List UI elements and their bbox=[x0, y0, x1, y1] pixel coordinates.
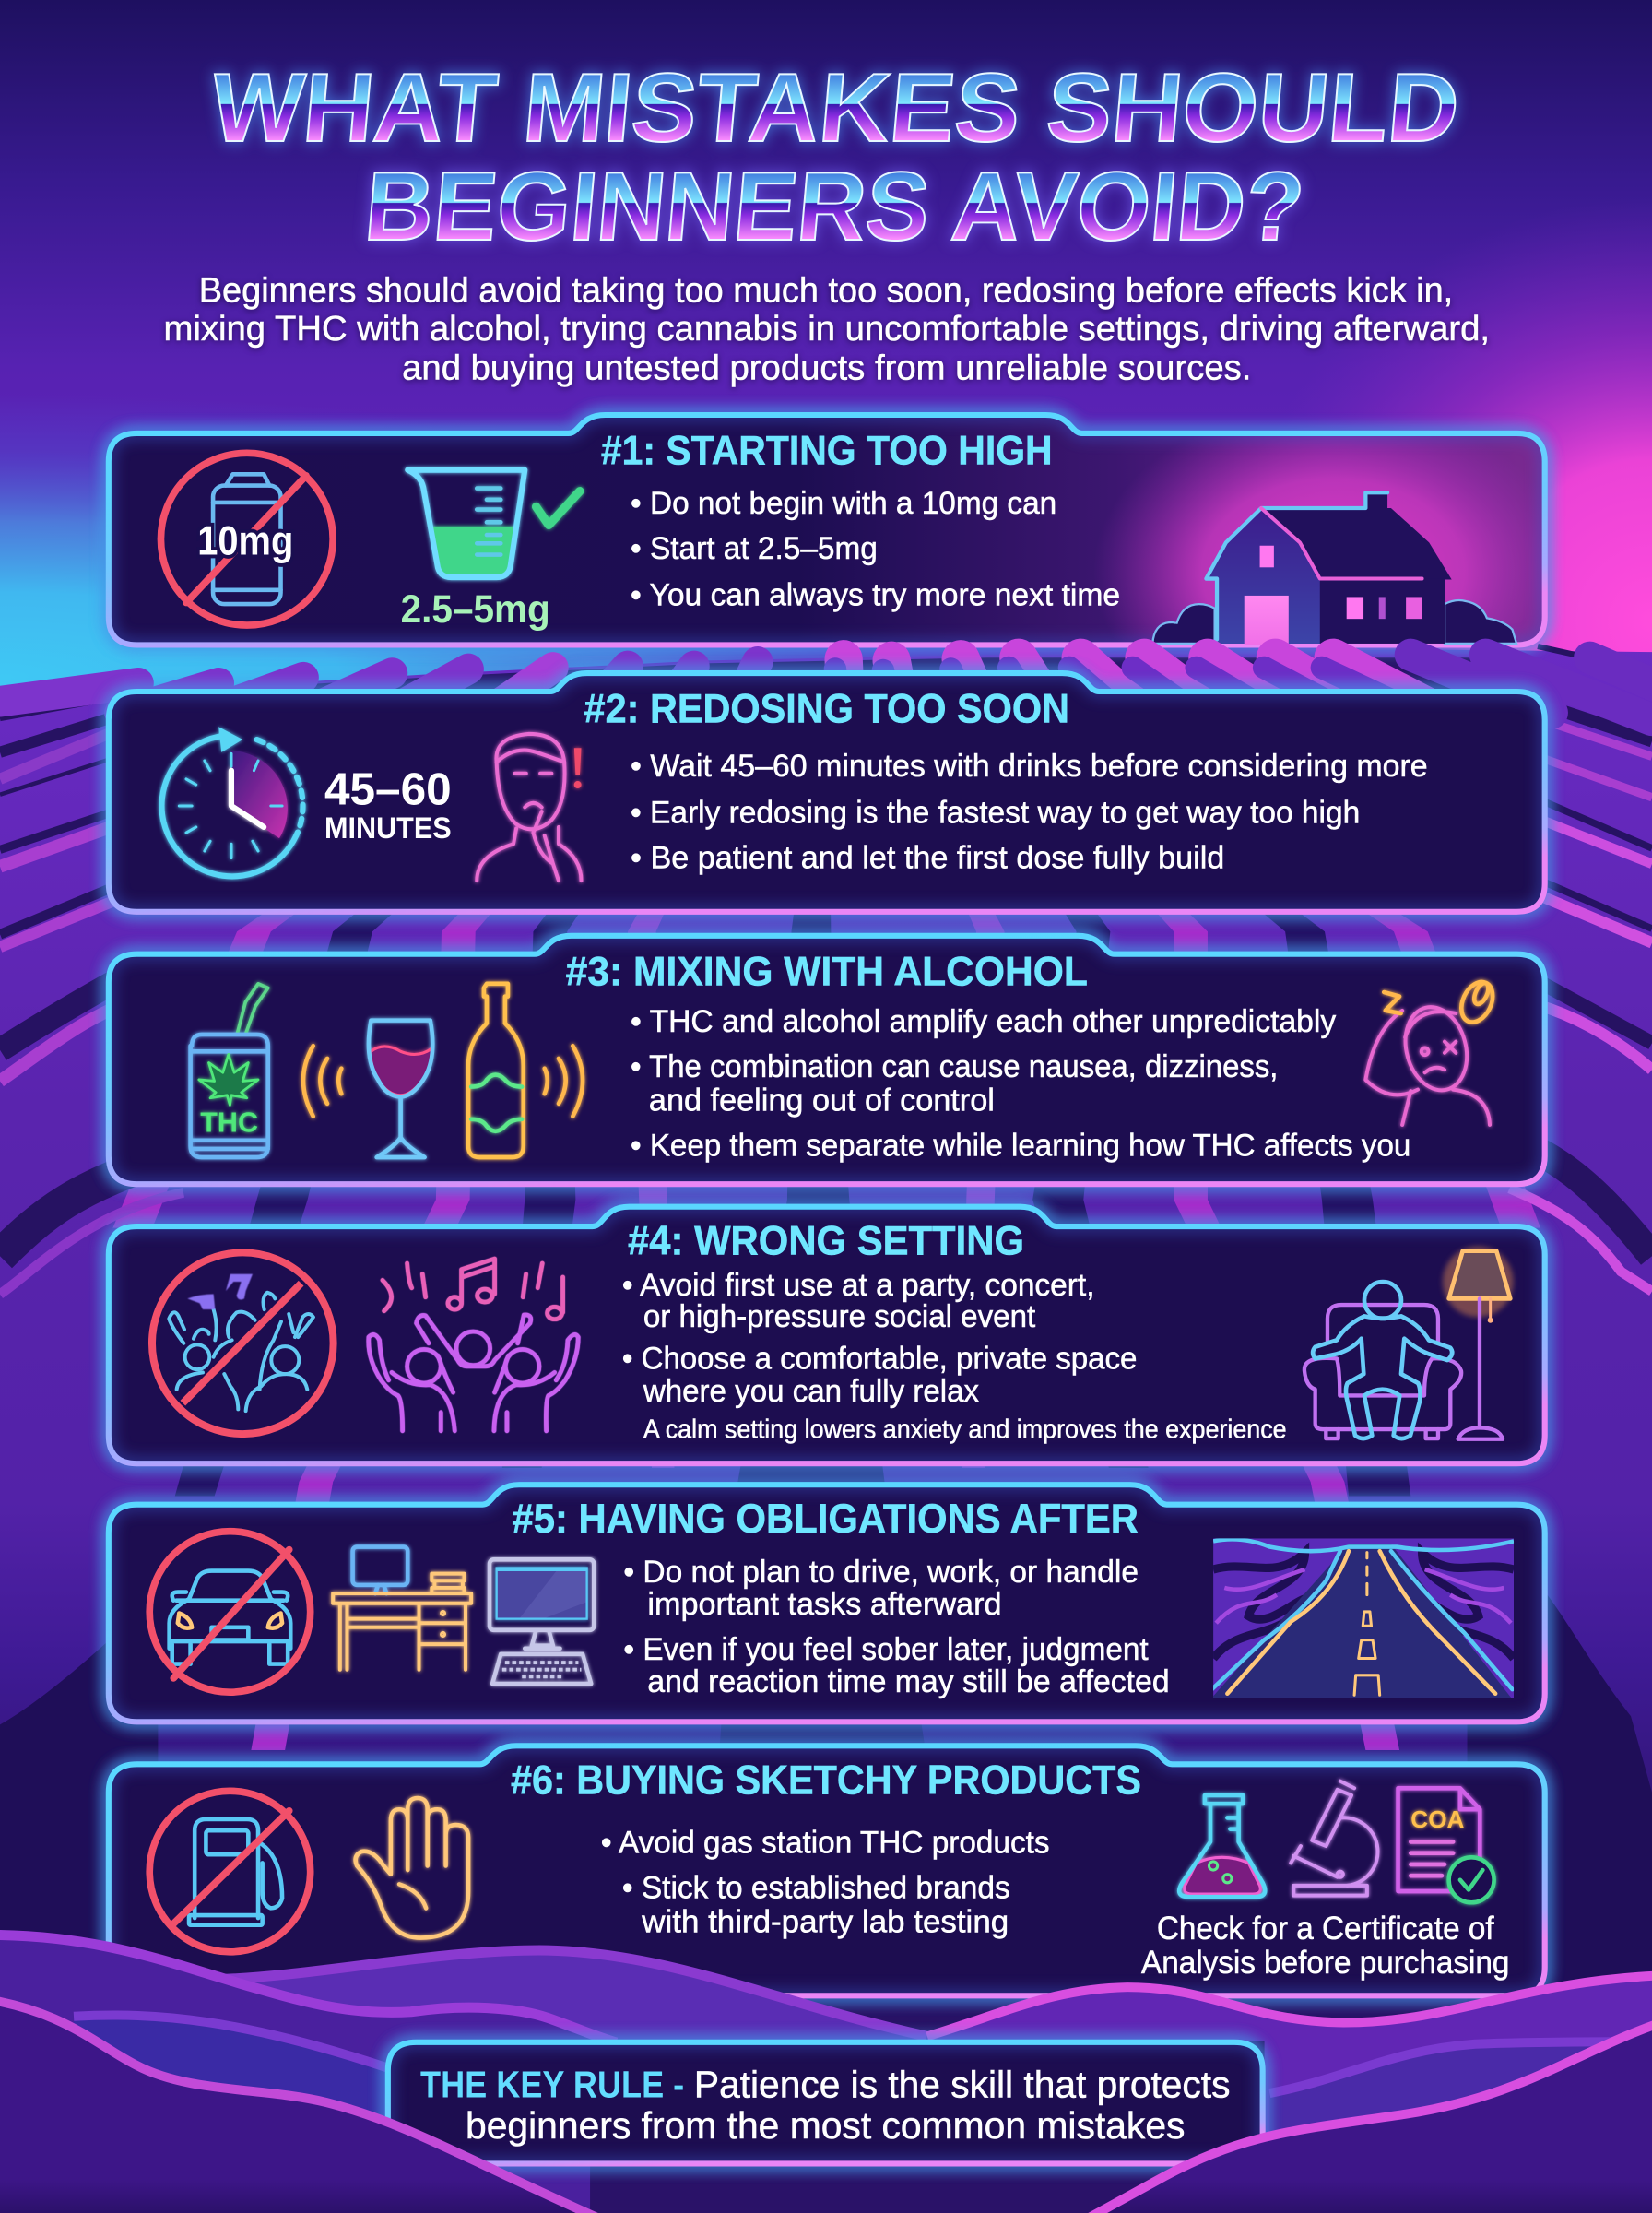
title bbox=[206, 53, 1464, 261]
panel 5: having obligations after bbox=[109, 1485, 1545, 1722]
icon: desk bbox=[333, 1547, 471, 1670]
bullets 3: and feeling out of control bbox=[649, 1083, 995, 1118]
icon: no 10mg can bbox=[160, 453, 333, 625]
icon: no car bbox=[149, 1532, 311, 1692]
bullets 6: • Avoid gas station THC products bbox=[601, 1826, 1050, 1861]
heading 5: #5: HAVING OBLIGATIONS AFTER bbox=[513, 1497, 1139, 1542]
panel 4: wrong setting bbox=[109, 1207, 1545, 1463]
bullets 1 bbox=[631, 486, 1120, 613]
panel 6: buying sketchy products bbox=[109, 1746, 1545, 1995]
bullets 1: • Do not begin with a 10mg can bbox=[631, 486, 1056, 521]
background: rolling hills behind key rule bbox=[0, 1935, 1652, 2213]
intro paragraph: and buying untested products from unreliable sources. bbox=[402, 349, 1251, 388]
bullets 2: • Be patient and let the first dose fully build bbox=[631, 840, 1224, 875]
heading 6: #6: BUYING SKETCHY PRODUCTS bbox=[511, 1757, 1141, 1803]
bullets 2 bbox=[631, 749, 1428, 875]
icon: party crowd bbox=[369, 1259, 578, 1431]
panel 3: mixing with alcohol bbox=[109, 936, 1545, 1184]
key rule text: Patience is the skill that protects bbox=[694, 2063, 1230, 2105]
bullets 2: • Wait 45–60 minutes with drinks before considering more bbox=[631, 749, 1428, 784]
bullets 1: • You can always try more next time bbox=[631, 578, 1120, 613]
bullets 5: • Do not plan to drive, work, or handle bbox=[623, 1555, 1139, 1590]
time label: MINUTES bbox=[324, 811, 452, 845]
callout: certificate of analysis bbox=[1141, 1911, 1509, 1981]
panel 1: starting too high bbox=[109, 415, 1545, 645]
icon: stop hand bbox=[356, 1798, 468, 1938]
illustration: winding road bbox=[1210, 1538, 1514, 1699]
icon: COA document bbox=[1398, 1788, 1494, 1902]
bullets 3: • Keep them separate while learning how THC affects you bbox=[631, 1129, 1410, 1164]
icon: microscope bbox=[1291, 1781, 1378, 1896]
icon: computer bbox=[490, 1559, 594, 1684]
bullets 5: important tasks afterward bbox=[647, 1587, 1002, 1622]
heading 4: #4: WRONG SETTING bbox=[628, 1219, 1024, 1264]
icon: THC can bbox=[191, 984, 268, 1157]
background: neon sky bbox=[0, 0, 1652, 1016]
title: WHAT MISTAKES SHOULD bbox=[206, 53, 1464, 162]
icon: clock bbox=[161, 727, 303, 876]
key rule text bbox=[420, 2063, 1230, 2147]
bullets 1: • Start at 2.5–5mg bbox=[631, 531, 878, 566]
bullets 5 bbox=[623, 1555, 1170, 1699]
panel: the key rule bbox=[388, 2042, 1263, 2163]
title: BEGINNERS AVOID? bbox=[360, 152, 1308, 261]
bullets 4: • Choose a comfortable, private space bbox=[622, 1342, 1137, 1377]
icon: COA document: COA bbox=[1410, 1805, 1465, 1833]
bullets 4 bbox=[622, 1268, 1287, 1444]
callout: certificate of analysis: Check for a Certificate of bbox=[1157, 1911, 1494, 1947]
bullets 4: or high-pressure social event bbox=[643, 1299, 1036, 1334]
background: field row bumps at the horizon bbox=[0, 655, 1652, 720]
intro paragraph: Beginners should avoid taking too much too soon, redosing before effects kick in, bbox=[199, 271, 1453, 311]
key rule text: beginners from the most common mistakes bbox=[466, 2104, 1185, 2147]
icon: wine glass bbox=[369, 1021, 432, 1157]
heading 2: #2: REDOSING TOO SOON bbox=[584, 687, 1069, 732]
bullets 3 bbox=[631, 1004, 1410, 1164]
foreground: front hills bbox=[0, 1998, 1652, 2213]
illustration: farmhouse bbox=[1152, 492, 1516, 645]
icon: no crowd bbox=[152, 1252, 334, 1434]
bullets 4: A calm setting lowers anxiety and improves the experience bbox=[643, 1414, 1287, 1444]
title: BEGINNERS AVOID? bbox=[360, 152, 1308, 261]
icon: vibration arcs bbox=[303, 1046, 583, 1117]
bullets 6: • Stick to established brands bbox=[622, 1871, 1010, 1906]
key rule text: THE KEY RULE - bbox=[420, 2063, 684, 2105]
icon: no 10mg can: 10mg bbox=[197, 519, 293, 564]
time label bbox=[324, 764, 452, 845]
bullets 4: where you can fully relax bbox=[643, 1374, 979, 1409]
icon: worried person bbox=[477, 734, 582, 881]
bullets 3: • THC and alcohol amplify each other unpredictably bbox=[631, 1004, 1337, 1039]
callout: certificate of analysis: Analysis before purchasing bbox=[1141, 1945, 1509, 1981]
intro paragraph: mixing THC with alcohol, trying cannabis in uncomfortable settings, driving afterward, bbox=[164, 309, 1490, 349]
bullets 3: • The combination can cause nausea, dizziness, bbox=[631, 1049, 1278, 1084]
heading 1: #1: STARTING TOO HIGH bbox=[601, 429, 1053, 474]
icon: bottle bbox=[468, 984, 524, 1157]
icon: no gas pump bbox=[149, 1791, 311, 1952]
icon: measuring cup bbox=[407, 470, 580, 577]
icon: person in armchair with lamp bbox=[1304, 1247, 1514, 1439]
heading 3: #3: MIXING WITH ALCOHOL bbox=[566, 949, 1088, 994]
title: WHAT MISTAKES SHOULD bbox=[206, 53, 1464, 162]
bullets 5: and reaction time may still be affected bbox=[647, 1664, 1170, 1699]
bullets 6: with third-party lab testing bbox=[641, 1904, 1009, 1939]
icon: lab flask bbox=[1179, 1795, 1265, 1897]
icon: THC can: THC bbox=[200, 1107, 258, 1139]
time label: 45–60 bbox=[324, 764, 452, 814]
bullets 4: • Avoid first use at a party, concert, bbox=[622, 1268, 1095, 1303]
icon: dizzy person bbox=[1365, 976, 1499, 1125]
bullets 6 bbox=[601, 1826, 1050, 1939]
panel 2: redosing too soon bbox=[109, 673, 1545, 912]
bullets 2: • Early redosing is the fastest way to get way too high bbox=[631, 795, 1360, 830]
background: striped fields bbox=[0, 646, 1652, 2213]
bullets 5: • Even if you feel sober later, judgment bbox=[623, 1632, 1149, 1667]
intro paragraph bbox=[164, 271, 1490, 388]
dose label: 2.5–5mg bbox=[401, 587, 550, 632]
